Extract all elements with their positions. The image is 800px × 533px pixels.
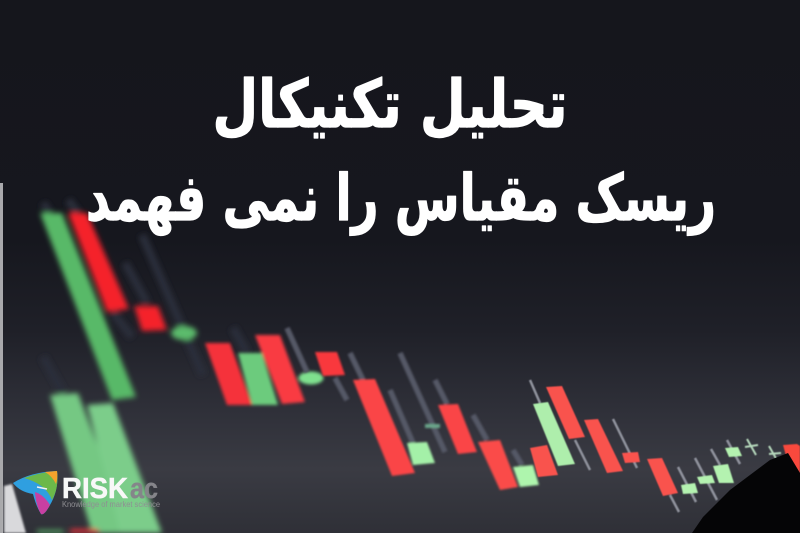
title line 1: تحلیل تکنیکال [212, 66, 568, 143]
candles: centre [287, 328, 539, 490]
icon: colourful triangle mark [13, 471, 57, 514]
wordmark: RISK [62, 473, 128, 505]
left edge light strip [0, 183, 3, 533]
blurred candles: centre left [205, 335, 324, 405]
title [86, 66, 716, 236]
sharp candles: right side [530, 380, 800, 512]
dark silhouette: hand in foreground [692, 453, 800, 533]
wordmark: ac [130, 473, 158, 505]
blurred candles: far left [37, 200, 247, 533]
tagline: Knowledge of market science [62, 499, 160, 509]
logo: RISKac [4, 471, 160, 533]
candlestick chart [37, 200, 800, 533]
logo white glare [4, 484, 26, 533]
